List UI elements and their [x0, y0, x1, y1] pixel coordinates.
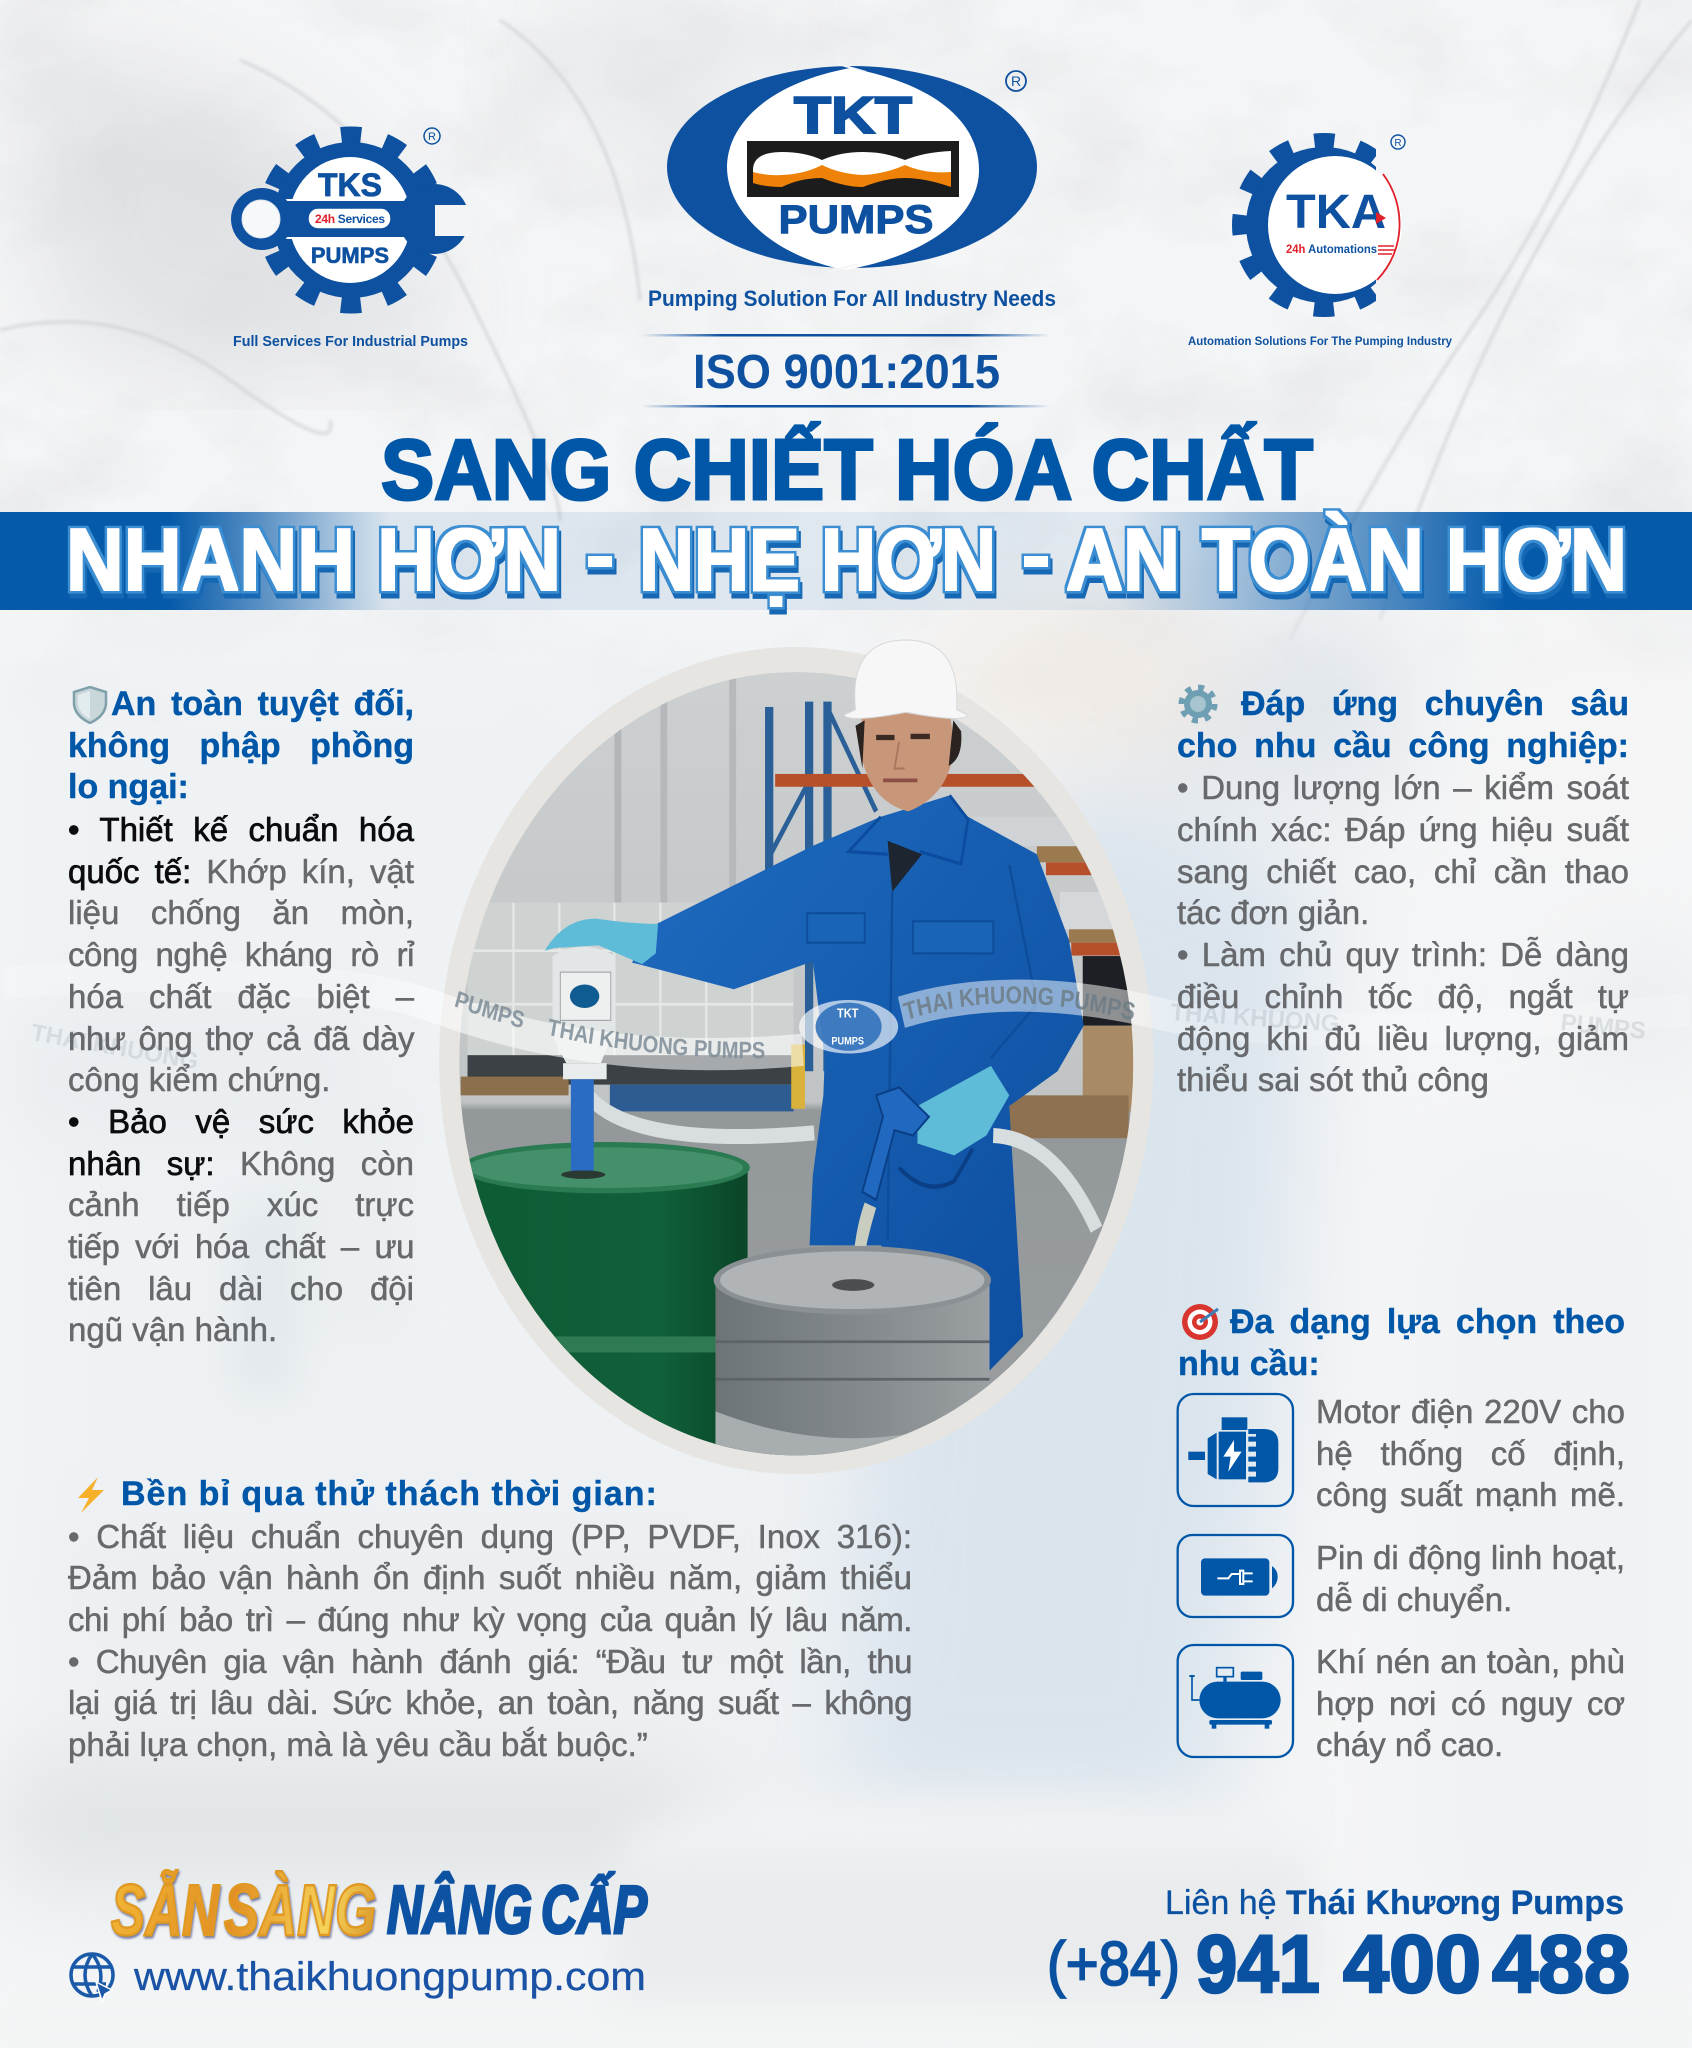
- option: khí nén: hợp nơi có nguy cơ: [1316, 1685, 1625, 1722]
- panel: bền bỉ qua thử thách thời gian: phải lựa chọn, mà là yêu cầu bắt buộc.”: [68, 1726, 648, 1763]
- nozzle and flow: [854, 1086, 974, 1246]
- panel: bền bỉ qua thử thách thời gian: Đảm bảo vận hành ổn định suốt nhiều năm, giảm thiểu: [68, 1559, 912, 1596]
- option: khí nén: [1316, 1641, 1625, 1766]
- option: khí nén: Khí nén an toàn, phù: [1316, 1643, 1625, 1680]
- icon: target: [1182, 1304, 1219, 1340]
- pump: [552, 947, 615, 1179]
- photo: worker pumping chemical between drums: [32, 640, 1645, 1474]
- panel: an toàn tuyệt đối: công nghệ kháng rò rỉ: [68, 936, 414, 973]
- option: pin di động: [1316, 1537, 1625, 1620]
- banner: Nhanh hơn - Nhẹ hơn - An toàn hơn: NHẸ HƠN: [639, 510, 996, 609]
- logo: TKT Pumps: [648, 66, 1056, 311]
- option: motor điện: công suất mạnh mẽ.: [1316, 1476, 1625, 1513]
- panel: đa dạng lựa chọn: Đa dạng lựa chọn theo: [1230, 1303, 1625, 1341]
- panel: an toàn tuyệt đối: liệu chống ăn mòn,: [68, 894, 414, 931]
- logo: TKA Automations: Automation Solutions For The Pumping Industry: [1188, 334, 1452, 348]
- logo: TKA Automations: TKA: [1286, 186, 1386, 239]
- option: motor điện: Motor điện 220V cho: [1316, 1393, 1625, 1430]
- logo: TKS Pumps: Full Services For Industrial Pumps: [233, 333, 468, 350]
- panel: bền bỉ qua thử thách thời gian: • Chất liệu chuẩn chuyên dụng (PP, PVDF, Inox 316):: [68, 1518, 912, 1555]
- logo: TKS Pumps: TKS: [318, 167, 382, 203]
- option: pin di động: dễ di chuyển.: [1316, 1581, 1512, 1618]
- logo: TKT Pumps: R: [1011, 73, 1021, 89]
- worker: [545, 710, 1084, 1374]
- panel: bền bỉ qua thử thách thời gian: • Chuyên gia vận hành đánh giá: “Đầu tư một lần, thu: [68, 1643, 912, 1680]
- logo: TKS Pumps: 24h Services: [315, 212, 385, 226]
- green drum: [470, 1142, 750, 1452]
- icon: compressor: [1178, 1645, 1293, 1757]
- logo: TKT Pumps: TKT: [794, 87, 912, 145]
- panel: bền bỉ qua thử thách thời gian: Bền bỉ qua thử thách thời gian:: [121, 1475, 658, 1513]
- panel: đáp ứng chuyên sâu: chính xác: Đáp ứng hiệu suất: [1177, 811, 1629, 848]
- icon: shield: [72, 686, 108, 724]
- storage racks: [765, 702, 1133, 1138]
- website with globe icon: www.thaikhuongpump.com: [133, 1955, 646, 1999]
- option: motor điện: hệ thống cố định,: [1316, 1435, 1625, 1472]
- panel: an toàn tuyệt đối: • Thiết kế chuẩn hóa: [68, 811, 414, 848]
- panel: an toàn tuyệt đối: cảnh tiếp xúc trực: [68, 1186, 414, 1223]
- watermark ribbon: TKT: [837, 1006, 859, 1021]
- logo: TKA Automations: 24h Automations: [1286, 242, 1377, 256]
- panel: đáp ứng chuyên sâu: thiểu sai sót thủ công: [1177, 1061, 1489, 1098]
- watermark ribbon: [440, 980, 1202, 1070]
- watermark ribbon: THAI KHUONG PUMPS: [549, 1018, 764, 1058]
- contact: phone number: (+84): [1047, 1930, 1180, 1999]
- panel: đáp ứng chuyên sâu: [1177, 685, 1630, 1098]
- contact: phone number: Liên hệ Thái Khương Pumps: [1165, 1884, 1624, 1922]
- panel: bền bỉ qua thử thách thời gian: [68, 1475, 912, 1764]
- option: motor điện: [1316, 1393, 1625, 1514]
- panel: an toàn tuyệt đối: tiếp với hóa chất – ưu: [68, 1228, 414, 1265]
- watermark ribbon: PUMPS: [454, 991, 524, 1028]
- panel: đáp ứng chuyên sâu: sang chiết cao, chỉ cần thao: [1177, 853, 1629, 890]
- icon: lightning: [78, 1477, 104, 1513]
- panel: an toàn tuyệt đối: không phập phồng: [68, 727, 414, 765]
- chemical tote: [461, 902, 805, 1111]
- panel: an toàn tuyệt đối: quốc tế: Khớp kín, vật: [68, 853, 414, 890]
- faint watermark text outside photo: THAI KHUONG: [1170, 999, 1340, 1038]
- logo: TKA Automations: R: [1394, 138, 1402, 149]
- callout: Sẵn sàng nâng cấp: SÀNG: [224, 1871, 376, 1951]
- logo: TKS Pumps: PUMPS: [311, 243, 389, 268]
- title: Sang chiết hóa chất: SANG CHIẾT HÓA CHẤT: [381, 422, 1313, 518]
- panel: đa dạng lựa chọn: nhu cầu:: [1178, 1345, 1320, 1383]
- panel: đáp ứng chuyên sâu: • Làm chủ quy trình: Dễ dàng: [1177, 936, 1629, 973]
- option: khí nén: cháy nổ cao.: [1316, 1726, 1503, 1763]
- icon: gear: [1178, 684, 1218, 724]
- option: pin di động: Pin di động linh hoạt,: [1316, 1539, 1625, 1576]
- safety helmet: [844, 640, 968, 718]
- panel: an toàn tuyệt đối: công kiểm chứng.: [68, 1061, 330, 1098]
- callout: Sẵn sàng nâng cấp: CẤP: [541, 1871, 647, 1948]
- panel: đáp ứng chuyên sâu: Đáp ứng chuyên sâu: [1241, 685, 1629, 723]
- panel: an toàn tuyệt đối: nhân sự: Không còn: [68, 1145, 414, 1182]
- banner: Nhanh hơn - Nhẹ hơn - An toàn hơn: AN TOÀN HƠN: [1066, 510, 1627, 609]
- panel: đáp ứng chuyên sâu: cho nhu cầu công nghiệp:: [1177, 727, 1629, 765]
- faint watermark text outside photo: THAI KHUONG: [29, 1019, 200, 1075]
- logo: TKT Pumps: Pumping Solution For All Industry Needs: [648, 286, 1056, 311]
- logo: TKS Pumps: [231, 126, 468, 350]
- panel: an toàn tuyệt đối: như ông thợ cả đã dày: [68, 1020, 414, 1056]
- callout: Sẵn sàng nâng cấp: SẴN: [111, 1870, 220, 1951]
- icon: motor: [1178, 1394, 1293, 1506]
- panel: an toàn tuyệt đối: hóa chất đặc biệt –: [68, 978, 414, 1015]
- panel: đa dạng lựa chọn: [1178, 1303, 1625, 1383]
- panel: an toàn tuyệt đối: • Bảo vệ sức khỏe: [68, 1103, 414, 1140]
- panel: an toàn tuyệt đối: ngũ vận hành.: [68, 1311, 277, 1348]
- panel: an toàn tuyệt đối: tiên lâu dài cho đội: [68, 1270, 414, 1307]
- logo: TKT Pumps: PUMPS: [778, 198, 934, 242]
- panel: an toàn tuyệt đối: [68, 685, 415, 1348]
- panel: an toàn tuyệt đối: An toàn tuyệt đối,: [111, 685, 414, 723]
- grey drum: [714, 1246, 991, 1456]
- logo: TKA Automations: [1188, 133, 1452, 348]
- icon: battery: [1178, 1535, 1293, 1617]
- contact: phone number: 941: [1196, 1919, 1320, 2010]
- watermark ribbon: PUMPS: [831, 1036, 864, 1048]
- panel: đáp ứng chuyên sâu: động khi đủ liều lượng, giảm: [1177, 1020, 1629, 1056]
- banner: Nhanh hơn - Nhẹ hơn - An toàn hơn: NHANH HƠN: [66, 510, 561, 609]
- panel: bền bỉ qua thử thách thời gian: chi phí bảo trì – đúng như kỳ vọng của quản lý lâu năm.: [68, 1601, 912, 1638]
- panel: đáp ứng chuyên sâu: tác đơn giản.: [1177, 894, 1369, 931]
- contact: phone number: 488: [1492, 1919, 1630, 2010]
- panel: bền bỉ qua thử thách thời gian: lại giá trị lâu dài. Sức khỏe, an toàn, năng suất – không: [68, 1684, 912, 1721]
- hoses: [588, 1095, 1097, 1229]
- banner: Nhanh hơn - Nhẹ hơn - An toàn hơn: [0, 508, 1692, 614]
- panel: đáp ứng chuyên sâu: • Dung lượng lớn – kiểm soát: [1177, 769, 1629, 806]
- contact: phone number: 400: [1343, 1919, 1481, 2010]
- photo frame: [439, 647, 1153, 1474]
- faint watermark text outside photo: [29, 999, 1647, 1075]
- panel: đáp ứng chuyên sâu: điều chỉnh tốc độ, ngắt tự: [1177, 978, 1629, 1015]
- faint watermark text outside photo: PUMPS: [1559, 1009, 1647, 1045]
- ISO certification: ISO 9001:2015: [693, 346, 1000, 399]
- watermark ribbon: THAI KHUONG PUMPS: [902, 986, 1135, 1020]
- logo: TKS Pumps: R: [428, 131, 436, 143]
- panel: an toàn tuyệt đối: lo ngại:: [68, 768, 189, 806]
- callout: Sẵn sàng nâng cấp: NÂNG: [387, 1871, 532, 1948]
